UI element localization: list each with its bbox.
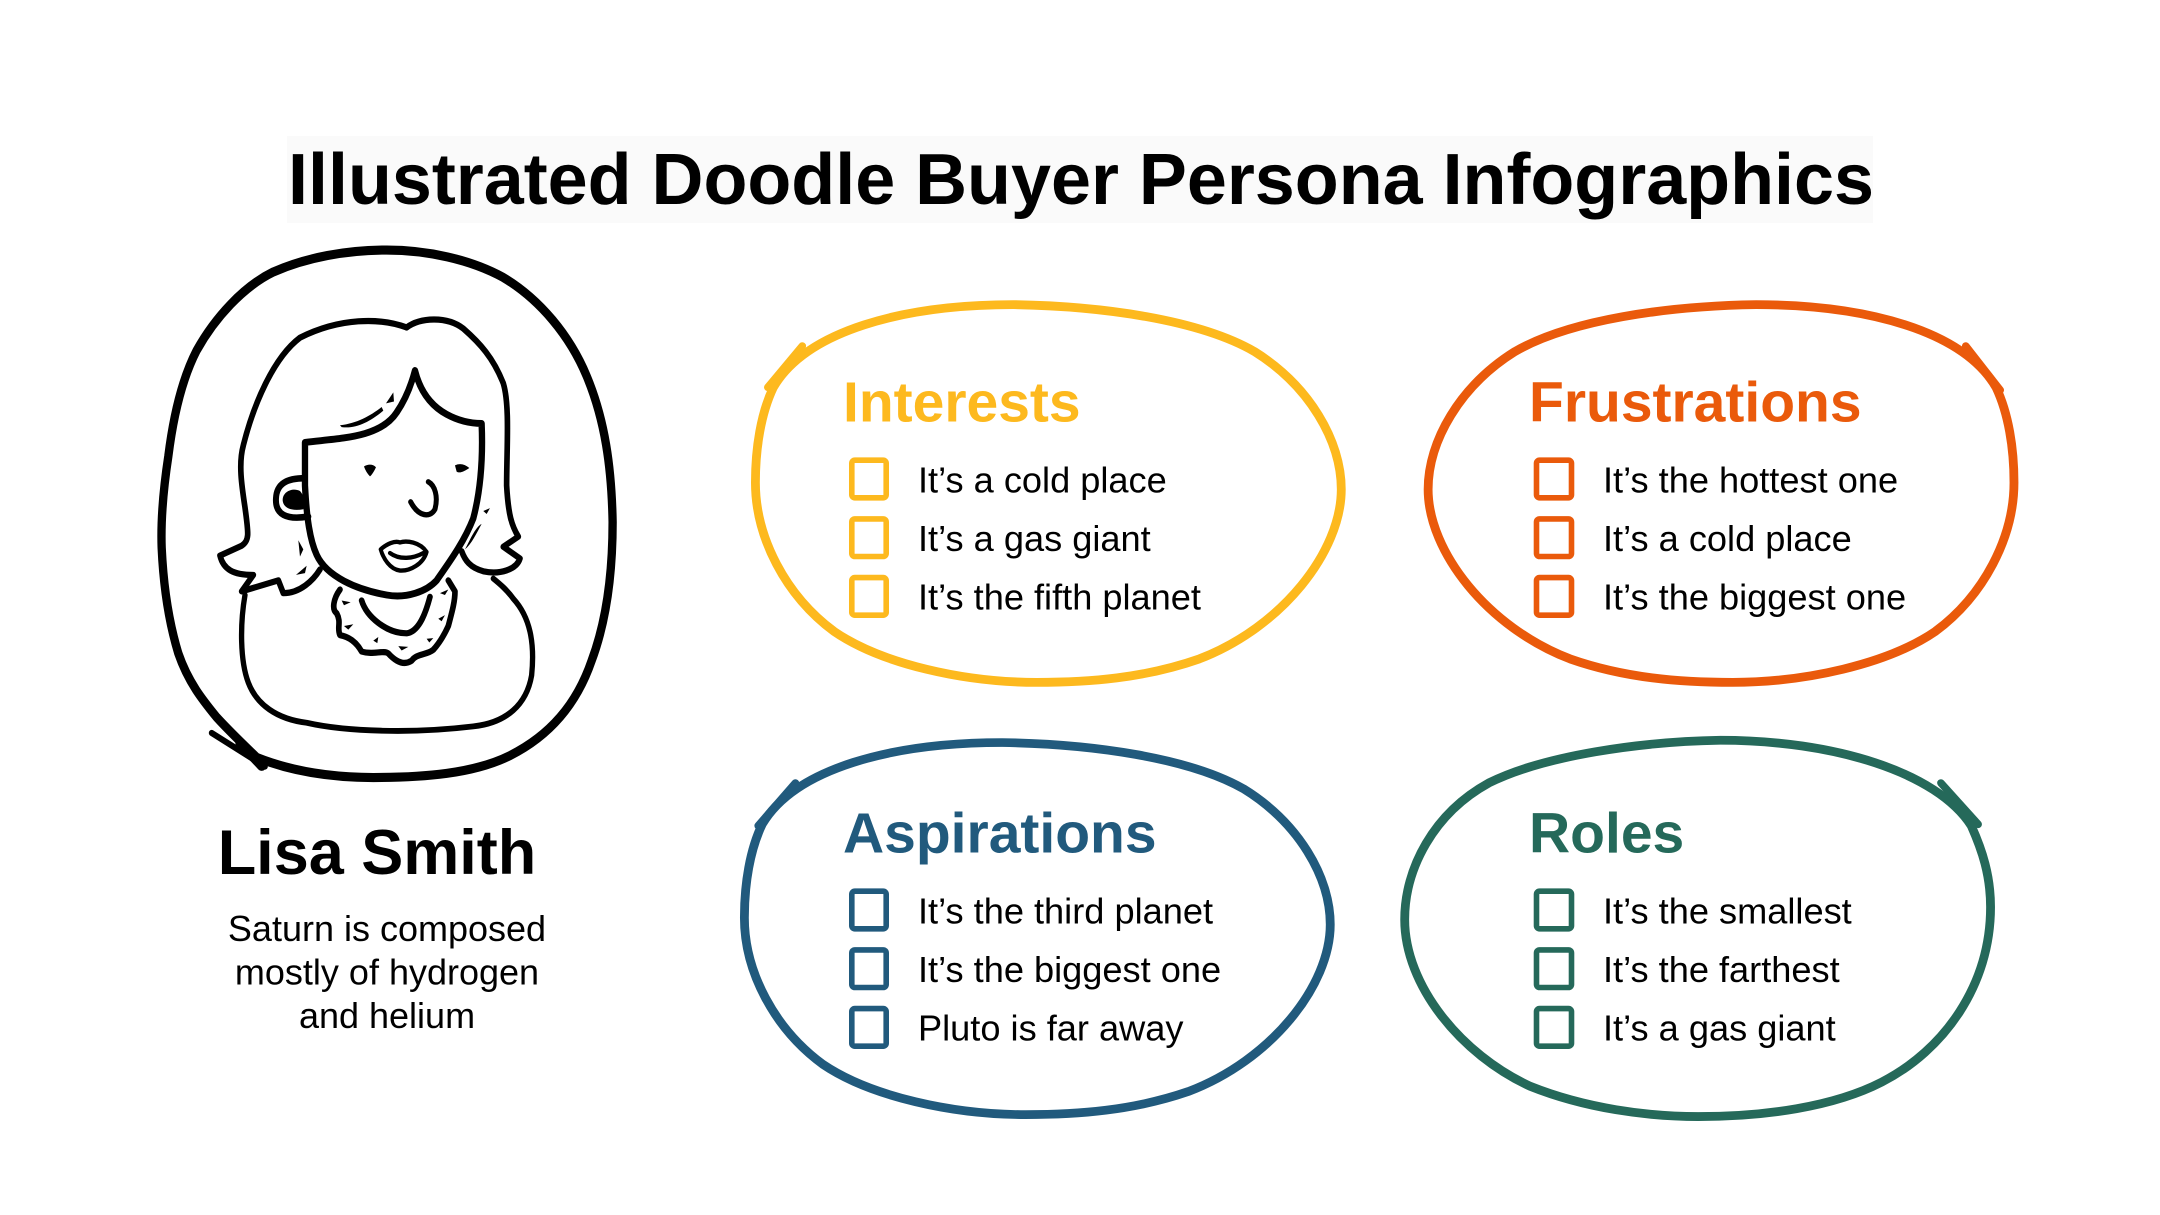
portrait frame: [161, 250, 613, 777]
blue arrow ring: [744, 743, 1330, 1115]
list: It’s the smallest: [1603, 890, 1852, 931]
fringe stroke: [340, 392, 394, 427]
list: [918, 459, 1201, 618]
collar inner: [362, 597, 430, 633]
list: It’s the biggest one: [1603, 577, 1906, 618]
title: Illustrated Doodle Buyer Persona Infographics: [288, 140, 1874, 220]
list: [1603, 890, 1852, 1049]
list: It’s the farthest: [1603, 949, 1840, 990]
panel: interests: [755, 305, 1341, 682]
list: Pluto is far away: [918, 1008, 1184, 1049]
panel: roles: [1405, 740, 1991, 1117]
persona description: and helium: [299, 995, 475, 1036]
eyes: [364, 464, 469, 476]
heading: Roles: [1529, 802, 1684, 866]
checkbox: [852, 891, 886, 1046]
woman doodle: [220, 320, 533, 731]
persona description: mostly of hydrogen: [235, 952, 539, 992]
checkbox: [1536, 891, 1572, 1046]
yellow arrow ring: [755, 305, 1341, 682]
collar: [334, 580, 455, 663]
collar dots: [342, 590, 448, 650]
panel: frustrations: [1428, 305, 2014, 682]
heading: Interests: [843, 371, 1081, 435]
list: It’s a gas giant: [918, 518, 1151, 559]
persona name: Lisa Smith: [218, 818, 536, 888]
body: [242, 579, 533, 731]
list: [918, 890, 1221, 1049]
list: It’s a gas giant: [1603, 1008, 1836, 1049]
list: It’s the third planet: [918, 890, 1213, 931]
persona description: Saturn is composed: [228, 908, 546, 949]
list: [1603, 459, 1906, 618]
list: It’s a cold place: [918, 459, 1167, 500]
hair: [220, 321, 407, 593]
heading: Aspirations: [843, 802, 1157, 866]
lips: [381, 542, 427, 571]
persona portrait: [161, 250, 613, 777]
checkbox: [852, 460, 886, 615]
checkbox: [1536, 460, 1572, 615]
panel: aspirations: [744, 743, 1330, 1115]
list: It’s a cold place: [1603, 518, 1852, 559]
hair marks: [296, 508, 490, 575]
ear inner: [283, 490, 304, 510]
list: It’s the hottest one: [1603, 459, 1898, 500]
ear: [276, 478, 308, 518]
list: It’s the biggest one: [918, 949, 1221, 990]
orange arrow ring: [1428, 305, 2014, 682]
heading: Frustrations: [1529, 371, 1862, 435]
list: It’s the fifth planet: [918, 577, 1201, 618]
hair right: [407, 320, 520, 572]
nose: [411, 482, 436, 515]
green arrow ring: [1405, 740, 1991, 1117]
face: [305, 371, 482, 596]
